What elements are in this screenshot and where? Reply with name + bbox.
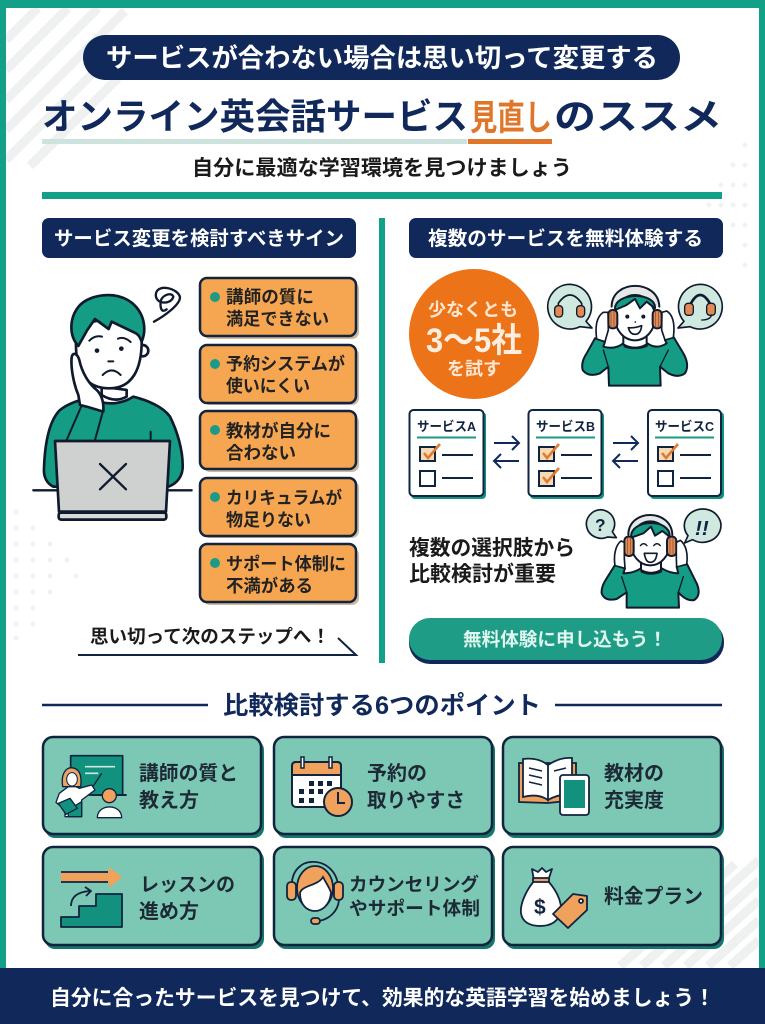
card: instructor quality: 講師の質と	[139, 762, 238, 785]
heading: change signs	[42, 218, 356, 258]
text: comparison matters: 複数の選択肢から	[409, 537, 575, 560]
card: pricing plans: 料金プラン	[604, 885, 703, 908]
callout: booking system: 使いにくい	[226, 376, 310, 396]
next step note with arrow	[78, 626, 356, 655]
card: lesson progression: レッスンの	[140, 874, 235, 896]
icon: teacher at board	[56, 756, 127, 818]
arrows: B and C	[613, 436, 638, 468]
footer banner	[0, 968, 765, 1024]
card: teaching materials: 充実度	[604, 789, 664, 812]
callout: instructor quality: 満足できない	[226, 309, 329, 329]
callout: support: サポート体制に	[226, 554, 346, 574]
callout: materials	[200, 411, 359, 472]
text: comparison matters: 比較検討が重要	[409, 562, 556, 586]
card: ease of booking: 予約の	[367, 762, 427, 785]
callout: support: 不満がある	[226, 576, 313, 596]
card: service B: サービスB	[536, 419, 595, 434]
top pill banner	[83, 35, 680, 80]
panel: comparison points grid	[43, 737, 724, 949]
card: service A: サービスA	[417, 419, 477, 434]
card: instructor quality: 教え方	[139, 789, 199, 812]
callout: curriculum: 物足りない	[226, 510, 311, 530]
arrows: A and B	[494, 436, 519, 468]
icon: calendar and clock	[292, 757, 352, 816]
icon: headset operator	[287, 862, 343, 924]
title	[42, 96, 722, 144]
badge: try 3 to 5 companies: 3〜5社	[426, 322, 522, 360]
card: service C	[648, 410, 724, 499]
badge: try 3 to 5 companies: 少なくとも	[428, 300, 518, 320]
illustration: smiling person with question bubbles: !!	[695, 517, 709, 540]
illustration: worried person at laptop	[33, 288, 192, 520]
illustration: smiling person with question bubbles: ?	[595, 515, 606, 535]
title: オンライン英会話サービス	[42, 96, 468, 137]
callout: booking system: 予約システムが	[226, 354, 345, 374]
callout: instructor quality	[200, 278, 359, 339]
card: counseling and support	[274, 847, 495, 949]
button: apply for free trial: 無料体験に申し込もう！	[463, 629, 667, 650]
card: ease of booking	[274, 737, 495, 838]
comparison cards: services A, B, C	[410, 410, 724, 499]
callout: curriculum	[200, 478, 359, 538]
illustration: person with headphones and speech bubbles	[548, 284, 722, 386]
callout: materials: 合わない	[226, 443, 296, 463]
button: apply for free trial	[409, 618, 724, 664]
icon: book and tablet	[519, 758, 589, 815]
heading: free trials	[409, 218, 723, 258]
heading: change signs: サービス変更を検討すべきサイン	[54, 228, 344, 250]
icon: money bag and price tag: $	[534, 896, 546, 919]
card: lesson progression	[43, 847, 264, 949]
illustration: smiling person with question bubbles	[586, 509, 721, 608]
callout: materials: 教材が自分に	[226, 421, 331, 441]
panel: free trials	[409, 218, 724, 664]
callout: booking system	[200, 345, 359, 405]
card: service A	[410, 410, 486, 499]
card: teaching materials: 教材の	[604, 762, 664, 785]
icon: arrow and stairs	[61, 867, 122, 927]
heading: free trials: 複数のサービスを無料体験する	[428, 228, 703, 250]
text: comparison matters	[409, 537, 575, 586]
next step note with arrow: 思い切って次のステップへ！	[90, 626, 330, 647]
card: service B	[528, 410, 604, 499]
card: instructor quality	[43, 737, 264, 838]
callout: instructor quality: 講師の質に	[226, 287, 314, 307]
callout: curriculum: カリキュラムが	[226, 488, 342, 508]
card: counseling and support: やサポート体制	[349, 898, 480, 919]
badge: try 3 to 5 companies: を試す	[447, 359, 501, 379]
section heading: six points: 比較検討する6つのポイント	[223, 692, 541, 720]
callout: support	[200, 544, 359, 605]
card: ease of booking: 取りやすさ	[367, 789, 465, 812]
card: teaching materials	[503, 737, 724, 838]
subtitle: 自分に最適な学習環境を見つけましょう	[192, 157, 572, 180]
icon: money bag and price tag	[521, 868, 587, 928]
top pill banner: サービスが合わない場合は思い切って変更する	[106, 43, 658, 73]
card: service C: サービスC	[655, 419, 715, 434]
card: lesson progression: 進め方	[139, 900, 199, 923]
panel: change signs	[33, 218, 359, 655]
card: pricing plans	[503, 847, 724, 949]
title: のススメ	[554, 96, 722, 137]
footer banner: 自分に合ったサービスを見つけて、効果的な英語学習を始めましょう！	[50, 987, 715, 1010]
card: counseling and support: カウンセリング	[349, 874, 479, 895]
title: 見直し	[470, 99, 552, 138]
badge: try 3 to 5 companies	[409, 269, 539, 399]
